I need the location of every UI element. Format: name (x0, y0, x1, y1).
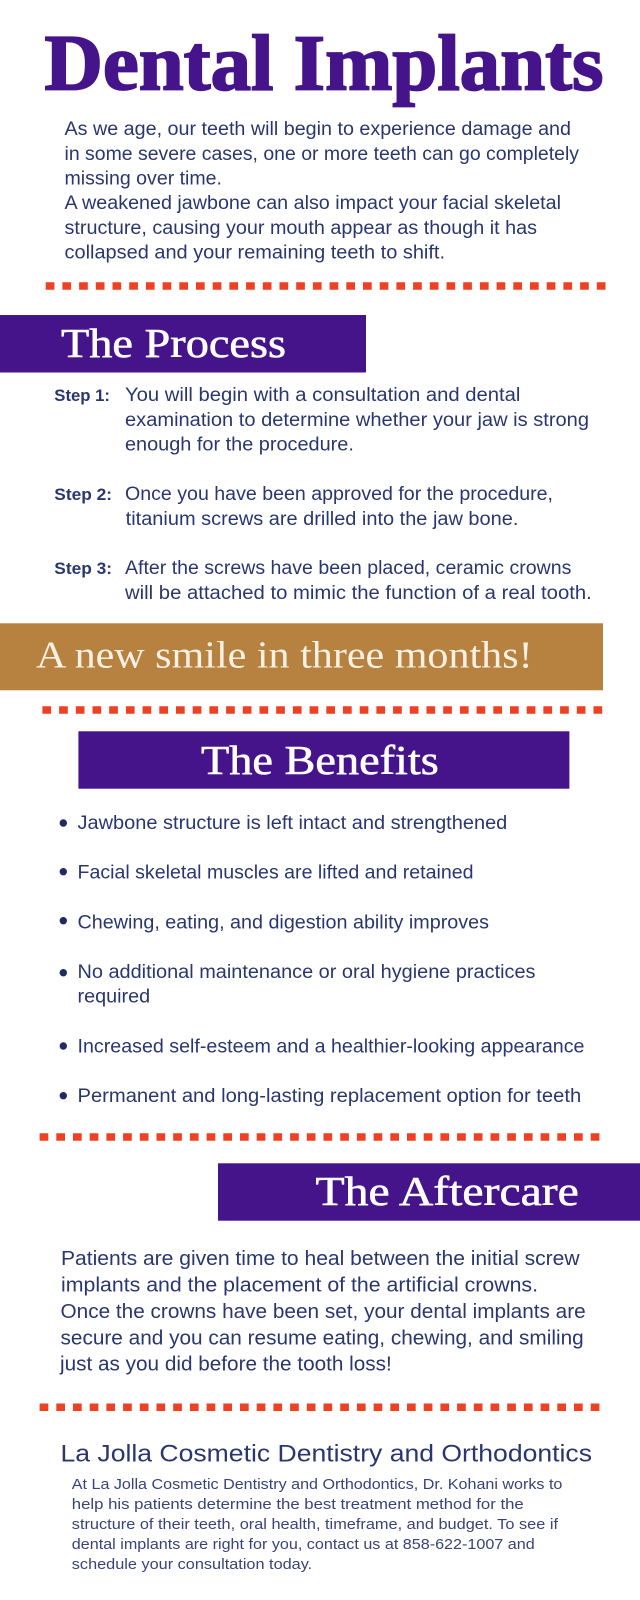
step 1 (54, 385, 589, 456)
step 2: Once you have been approved for the procedure, (125, 484, 553, 505)
practice description text block: dental implants are right for you, contact us at 858-622-1007 and (72, 1536, 535, 1553)
panel: benefits list: Increased self-esteem and a healthier-looking appearance (78, 1036, 584, 1057)
panel: benefits list: No additional maintenance or oral hygiene practices (78, 962, 536, 983)
step 1: Step 1: (54, 386, 110, 405)
panel: benefits list: Jawbone structure is left intact and strengthened (78, 813, 507, 834)
practice description text block: structure of their teeth, oral health, timeframe, and budget. To see if (72, 1516, 559, 1533)
step 3: will be attached to mimic the function of a real tooth. (124, 583, 592, 604)
aftercare text block: just as you did before the tooth loss! (59, 1354, 392, 1376)
step 1: enough for the procedure. (125, 435, 354, 456)
heading: The Process (0, 315, 366, 372)
panel: process steps (54, 385, 592, 604)
intro text block: structure, causing your mouth appear as though it has (64, 218, 537, 239)
callout: a new smile in three months: A new smile in three months! (36, 635, 533, 677)
panel: benefits list: required (78, 987, 150, 1008)
heading: The Aftercare: The Aftercare (316, 1168, 579, 1214)
intro text block: As we age, our teeth will begin to experience damage and (64, 119, 571, 140)
aftercare text block (59, 1248, 586, 1376)
heading: The Benefits: The Benefits (201, 737, 439, 783)
heading: The Process: The Process (61, 320, 286, 366)
heading: practice name: La Jolla Cosmetic Dentistry and Orthodontics (60, 1441, 592, 1468)
aftercare text block: Once the crowns have been set, your dental implants are (60, 1301, 586, 1323)
panel: benefits list (60, 813, 585, 1107)
step 3 (54, 558, 592, 604)
intro text block: A weakened jawbone can also impact your facial skeletal (64, 193, 561, 214)
heading: The Aftercare (218, 1163, 640, 1221)
intro text block: in some severe cases, one or more teeth can go completely (64, 144, 580, 165)
step 1: examination to determine whether your jaw is strong (125, 410, 589, 431)
step 2: Step 2: (54, 485, 112, 504)
callout: a new smile in three months (0, 623, 603, 690)
step 3: After the screws have been placed, ceramic crowns (125, 558, 571, 579)
practice description text block: At La Jolla Cosmetic Dentistry and Orthodontics, Dr. Kohani works to (72, 1476, 562, 1493)
heading: The Benefits (78, 731, 569, 789)
aftercare text block: secure and you can resume eating, chewing, and smiling (60, 1327, 584, 1349)
step 2 (54, 484, 553, 530)
intro text block: missing over time. (64, 168, 222, 190)
practice description text block: schedule your consultation today. (72, 1556, 312, 1573)
step 2: titanium screws are drilled into the jaw bone. (126, 509, 518, 530)
panel: benefits list: Permanent and long-lasting replacement option for teeth (78, 1086, 581, 1107)
step 3: Step 3: (54, 559, 112, 578)
practice description text block: help his patients determine the best treatment method for the (72, 1496, 524, 1513)
aftercare text block: Patients are given time to heal between the initial screw (61, 1248, 580, 1270)
practice description text block (72, 1476, 562, 1573)
intro text block: collapsed and your remaining teeth to shift. (64, 243, 445, 264)
panel: benefits list: Chewing, eating, and digestion ability improves (78, 912, 489, 933)
title: Dental Implants (44, 20, 604, 107)
intro text block (64, 119, 580, 264)
panel: benefits list: Facial skeletal muscles are lifted and retained (78, 863, 473, 884)
step 1: You will begin with a consultation and dental (125, 385, 520, 406)
aftercare text block: implants and the placement of the artificial crowns. (61, 1274, 538, 1296)
